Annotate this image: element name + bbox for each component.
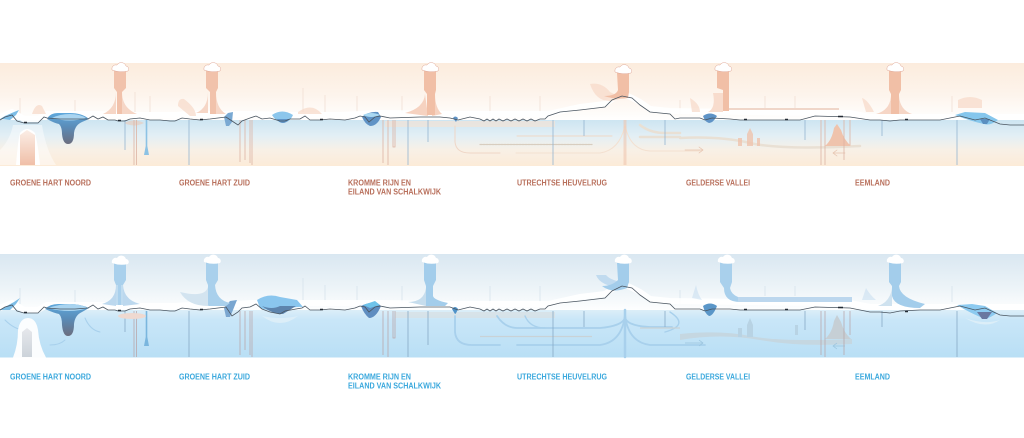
label: Groene Hart Noord: GROENE HART NOORD bbox=[10, 178, 91, 188]
pale sky measuring lines bbox=[20, 88, 952, 114]
label: Eiland van Schalkwijk: EILAND VAN SCHALKWIJK bbox=[348, 382, 441, 390]
wells bbox=[125, 311, 957, 357]
tower: Utrechtse Heuvelrug bbox=[604, 65, 632, 99]
label: Gelderse Vallei: GELDERSE VALLEI bbox=[686, 372, 750, 382]
water basins and lakes bbox=[0, 296, 1000, 336]
ground line bbox=[0, 96, 1024, 125]
grey band under ground bbox=[395, 312, 555, 318]
left arch bbox=[13, 318, 46, 358]
labels: warm section bbox=[10, 178, 890, 196]
tower: Eemland bbox=[878, 255, 925, 308]
label: Kromme Rijn: KROMME RIJN EN bbox=[348, 178, 411, 188]
tower: Kromme Rijn bbox=[405, 63, 442, 116]
label: Kromme Rijn: KROMME RIJN EN bbox=[348, 372, 411, 382]
panel: wet scenario cross-section bbox=[0, 254, 1024, 358]
tower: Groene Hart Noord bbox=[103, 63, 137, 114]
white snow band above ground bbox=[0, 283, 1024, 310]
sky background bbox=[0, 63, 1024, 121]
pale surface forms bbox=[596, 275, 876, 300]
subsurface background bbox=[0, 120, 1024, 166]
panel: warm scenario cross-section bbox=[0, 63, 1024, 166]
wells bbox=[125, 120, 957, 165]
label: Groene Hart Noord: GROENE HART NOORD bbox=[10, 372, 91, 382]
label: Utrechtse Heuvelrug: UTRECHTSE HEUVELRUG bbox=[517, 372, 607, 382]
pale band under ground bbox=[385, 121, 555, 127]
labels: wet section bbox=[10, 372, 890, 390]
label: Utrechtse Heuvelrug: UTRECHTSE HEUVELRUG bbox=[517, 178, 607, 188]
pink aquifer body bbox=[124, 120, 851, 165]
sky background bbox=[0, 254, 1024, 312]
tower: Groene Hart Zuid bbox=[196, 63, 226, 114]
ground ticks bbox=[24, 308, 908, 312]
ground line bbox=[0, 286, 1024, 316]
drop well bbox=[144, 120, 149, 155]
label: Eiland van Schalkwijk: EILAND VAN SCHALKWIJK bbox=[348, 188, 441, 196]
pale lens bbox=[118, 313, 146, 319]
water basins bbox=[0, 110, 998, 144]
label: Groene Hart Zuid: GROENE HART ZUID bbox=[179, 178, 250, 188]
pale sky measuring lines bbox=[20, 278, 952, 304]
label: Groene Hart Zuid: GROENE HART ZUID bbox=[179, 372, 250, 382]
subsurface flows bbox=[5, 310, 705, 357]
drop well bbox=[144, 311, 149, 346]
tower: Kromme Rijn bbox=[408, 255, 448, 306]
subsurface background bbox=[0, 310, 1024, 358]
white snow band above ground bbox=[0, 93, 1024, 119]
tower: Gelderse Vallei bbox=[708, 63, 839, 112]
tower: Utrechtse Heuvelrug bbox=[602, 255, 632, 291]
tower: Gelderse Vallei bbox=[718, 255, 852, 302]
tower: Groene Hart Zuid bbox=[180, 255, 230, 306]
ground ticks bbox=[24, 116, 908, 122]
aquifer band and grey body bbox=[680, 315, 852, 349]
subsurface flows bbox=[455, 125, 860, 156]
label: Eemland: EEMLAND bbox=[855, 178, 890, 188]
pale surface forms bbox=[32, 84, 982, 116]
left arch bbox=[0, 125, 56, 165]
tower: Eemland bbox=[876, 63, 912, 114]
label: Gelderse Vallei: GELDERSE VALLEI bbox=[686, 178, 750, 188]
label: Eemland: EEMLAND bbox=[855, 372, 890, 382]
tower: Groene Hart Noord bbox=[102, 256, 140, 306]
